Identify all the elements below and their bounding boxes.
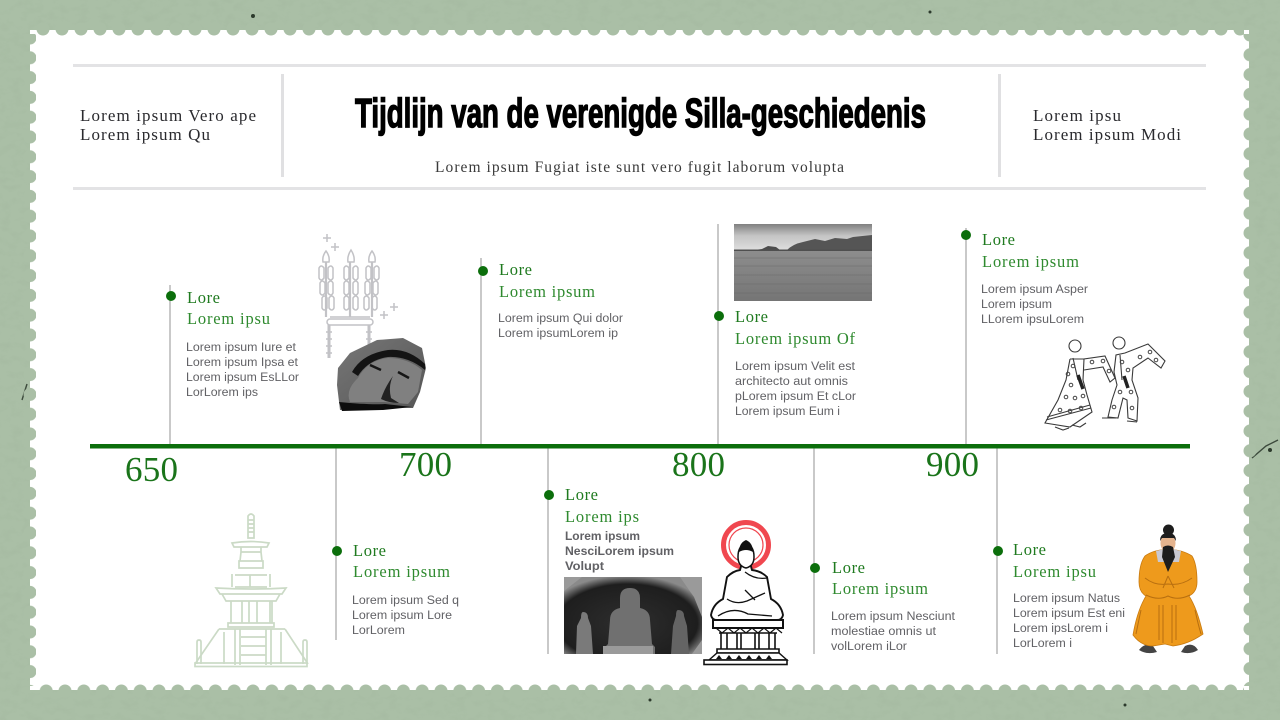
event 8: Lore [1013, 540, 1046, 559]
event 3: Lorem ipsum Of [735, 329, 856, 348]
event 4 [961, 230, 1088, 326]
photo: sea and mountains [734, 224, 872, 301]
event 3: Lorem ipsum Eum i [735, 404, 840, 418]
event 6: Volupt [565, 559, 604, 573]
event 7: Lorem ipsum [832, 579, 928, 598]
event 1: Lorem ipsu [187, 309, 270, 328]
event 5: Lorem ipsum Sed q [352, 593, 459, 607]
event 6 [544, 485, 674, 573]
icon: seated official in orange robe [1133, 524, 1203, 653]
event 5: Lorem ipsum [353, 562, 450, 581]
event 2: Lorem ipsum Qui dolor [498, 311, 623, 325]
icon: stone face fragment [337, 338, 426, 411]
event 6: Lorem ipsum [565, 529, 640, 543]
event 1: Lorem ipsum EsLLor [186, 370, 299, 384]
event 1: Lore [187, 288, 220, 307]
icon: pagoda line art [195, 514, 308, 666]
year labels: 650 [125, 450, 178, 489]
event 4: LLorem ipsuLorem [981, 312, 1084, 326]
event 7: Lorem ipsum Nesciunt [831, 609, 956, 623]
event 3: architecto aut omnis [735, 374, 848, 388]
event 2: Lore [499, 260, 532, 279]
event 3: pLorem ipsum Et cLor [735, 389, 856, 403]
event 7: molestiae omnis ut [831, 624, 937, 638]
event 1: Lorem ipsum Ipsa et [186, 355, 299, 369]
event 4: Lorem ipsum [981, 297, 1052, 311]
header right text [1033, 106, 1181, 144]
event 6: Lorem ips [565, 507, 639, 526]
header panel [73, 64, 1206, 190]
event 1: Lorem ipsum Iure et [186, 340, 297, 354]
title: Tijdlijn van de verenigde Silla-geschiedenis [355, 90, 926, 136]
event 1 [166, 288, 299, 399]
header left text: Lorem ipsum Qu [80, 125, 210, 144]
timeline axis with stems [90, 224, 1190, 654]
event 8: Lorem ipsum Est eni [1013, 606, 1125, 620]
event 8: Lorem ipsLorem i [1013, 621, 1108, 635]
event 8: LorLorem i [1013, 636, 1072, 650]
icon: gold crown outline [319, 234, 398, 358]
year labels: 900 [926, 445, 979, 484]
event 4: Lore [982, 230, 1015, 249]
event 3: Lore [735, 307, 768, 326]
event 8: Lorem ipsum Natus [1013, 591, 1120, 605]
event 7 [810, 558, 956, 653]
event 8 [993, 540, 1125, 650]
year labels [125, 445, 979, 489]
event 5: Lorem ipsum Lore [352, 608, 452, 622]
header right text: Lorem ipsu [1033, 106, 1122, 125]
header left text [80, 106, 256, 144]
event 3: Lorem ipsum Velit est [735, 359, 856, 373]
event 1: LorLorem ips [186, 385, 258, 399]
event 6: NesciLorem ipsum [565, 544, 674, 558]
subtitle: Lorem ipsum Fugiat iste sunt vero fugit laborum volupta [435, 159, 844, 176]
event 7: Lore [832, 558, 865, 577]
year labels: 800 [672, 445, 725, 484]
event 8: Lorem ipsu [1013, 562, 1096, 581]
year labels: 700 [399, 445, 452, 484]
event 6: Lore [565, 485, 598, 504]
photo: cave Buddha statues [564, 577, 702, 654]
event 2: Lorem ipsum [499, 282, 595, 301]
event 5: Lore [353, 541, 386, 560]
header right text: Lorem ipsum Modi [1033, 125, 1181, 144]
event 7: volLorem iLor [831, 639, 907, 653]
event 4: Lorem ipsum Asper [981, 282, 1088, 296]
event 4: Lorem ipsum [982, 252, 1079, 271]
header left text: Lorem ipsum Vero ape [80, 106, 256, 125]
event 2 [478, 260, 623, 340]
icon: seated Buddha [704, 522, 787, 664]
icon: two dancers line art [1045, 337, 1165, 430]
event 5: LorLorem [352, 623, 405, 637]
event 3 [714, 307, 856, 418]
event 2: Lorem ipsumLorem ip [498, 326, 618, 340]
event 5 [332, 541, 459, 637]
